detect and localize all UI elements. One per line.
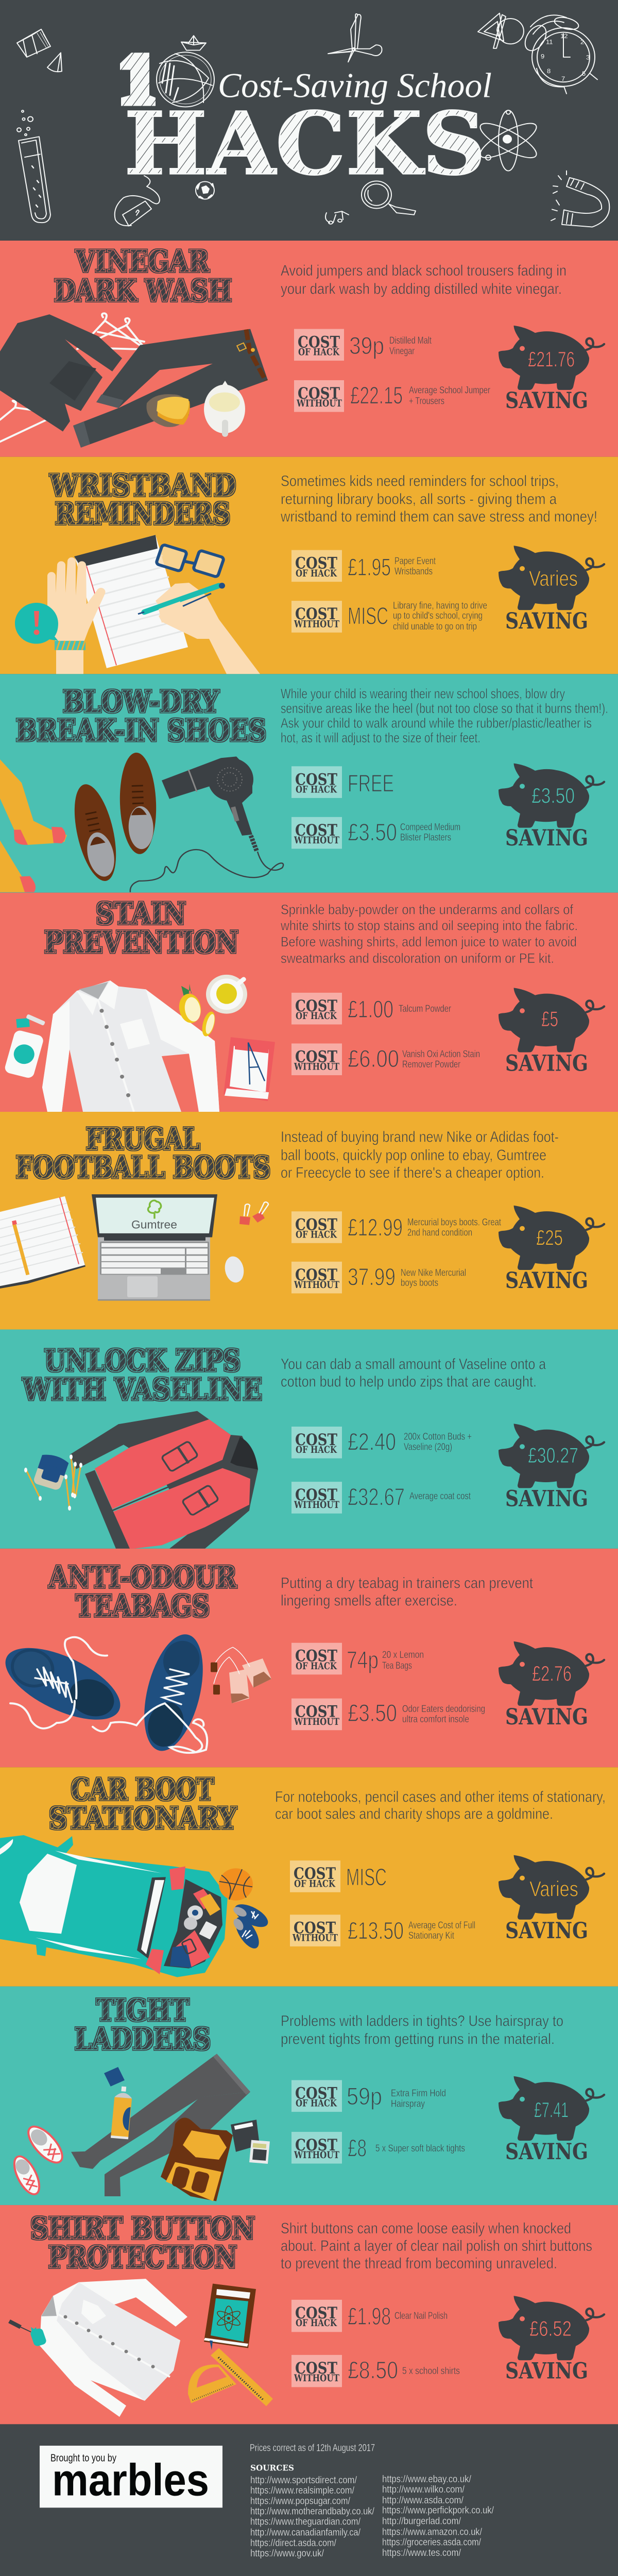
price note: Prices correct as of 12th August 2017 <box>250 2443 375 2453</box>
note: Compeed Medium <box>400 822 460 833</box>
value: £12.99 <box>348 1214 403 1241</box>
badge: cost of hack: COST <box>295 1430 337 1449</box>
badge: cost of hack: OF HACK <box>296 1660 337 1672</box>
saving label: SAVING <box>505 1704 588 1730</box>
note: Tea Bags <box>382 1660 412 1671</box>
panel: stain prevention <box>0 893 618 1112</box>
saving amount: £6.52 <box>529 2317 572 2341</box>
icon: piggy bank <box>499 2076 604 2141</box>
sources column 2 <box>382 2474 494 2558</box>
note: Paper Event <box>394 556 436 567</box>
note <box>394 556 436 577</box>
body text: Putting a dry teabag in trainers can prevent <box>281 1575 534 1591</box>
value: 37.99 <box>348 1263 396 1291</box>
clock numerals: 5 <box>582 70 586 77</box>
icon: alarm clock <box>521 15 597 94</box>
badge: cost of hack: OF HACK <box>296 1229 337 1240</box>
badge: cost of hack: COST <box>295 770 337 789</box>
heading: CAR BOOT <box>71 1772 214 1807</box>
heading: WRISTBAND <box>49 468 236 503</box>
body text: Sprinkle baby-powder on the underarms and collars of <box>281 902 573 917</box>
badge: cost of hack: OF HACK <box>296 2317 337 2329</box>
heading <box>54 244 232 309</box>
note: Average Cost of Full <box>408 1920 475 1931</box>
note: Stationary Kit <box>408 1930 454 1941</box>
value: FREE <box>348 770 394 797</box>
sources column 2: http://www.wilko.com/ <box>382 2484 465 2495</box>
heading: BREAK-IN SHOES <box>16 714 266 749</box>
badge: cost of hack: COST <box>295 1647 337 1665</box>
icon: piggy bank <box>499 1641 604 1706</box>
body text: You can dab a small amount of Vaseline onto a <box>281 1356 546 1372</box>
illustration: coat, vaseline, cotton buds <box>24 1411 258 1549</box>
note: ultra comfort insole <box>402 1714 469 1725</box>
badge: cost of hack: COST <box>295 553 337 572</box>
sources column 1: https://www.realsimple.com/ <box>250 2485 354 2496</box>
clock numerals <box>541 32 590 82</box>
panel: tight ladders <box>0 1987 618 2205</box>
icon: piggy bank <box>499 1206 604 1270</box>
illustration: car with open boot <box>0 1835 272 1977</box>
badge: cost of hack <box>291 550 342 582</box>
body text <box>281 686 608 745</box>
badge: cost of hack: COST <box>295 1215 337 1234</box>
badge: cost without <box>291 2132 342 2164</box>
body text <box>281 1129 559 1181</box>
note: Average School Jumper <box>409 385 490 396</box>
saving label: SAVING <box>505 1486 588 1512</box>
note: up to child's school, crying <box>393 611 483 621</box>
badge: cost of hack <box>291 766 342 798</box>
panel: header <box>0 0 618 241</box>
note <box>391 2088 446 2109</box>
saving amount: Varies <box>529 1877 578 1901</box>
value: 74p <box>347 1647 379 1674</box>
body text <box>281 1575 534 1609</box>
note: 5 x Super soft black tights <box>375 2143 465 2154</box>
badge: cost of hack: OF HACK <box>294 1878 336 1889</box>
note <box>393 600 487 632</box>
note <box>401 1267 466 1289</box>
sources column 2: https://www.perfickpork.co.uk/ <box>382 2505 494 2516</box>
badge: cost without: COST <box>298 384 340 403</box>
icon: piggy bank <box>499 2296 604 2360</box>
sources column 2: http://burgerlad.com/ <box>382 2516 461 2527</box>
note <box>407 1217 501 1238</box>
note: + Trousers <box>409 396 444 406</box>
value: MISC <box>346 1864 387 1891</box>
saving amount: £2.76 <box>532 1662 572 1686</box>
badge: cost without: WITHOUT <box>296 398 342 409</box>
panel: anti-odour teabags <box>0 1549 618 1767</box>
icon: basketball as zero <box>157 52 214 107</box>
note: Hairspray <box>391 2098 425 2109</box>
icon: cone <box>47 53 62 72</box>
badge: cost without: COST <box>295 1265 337 1284</box>
badge: cost without <box>291 601 342 633</box>
icon: football <box>196 181 214 199</box>
heading <box>16 1122 270 1185</box>
note: Library fine, having to drive <box>393 600 487 611</box>
panel: shirt button protection <box>0 2205 618 2424</box>
sources column 2: https://www.ebay.co.uk/ <box>382 2474 471 2485</box>
saving label: SAVING <box>505 1268 588 1294</box>
note: Mercurial boys boots. Great <box>407 1217 501 1228</box>
clock numerals: 7 <box>561 76 565 82</box>
note: Vinegar <box>389 346 415 357</box>
value: MISC <box>348 603 388 630</box>
value: £32.67 <box>348 1484 405 1511</box>
clock numerals: 3 <box>586 54 590 61</box>
heading: FOOTBALL BOOTS <box>16 1150 270 1185</box>
badge: cost of hack: OF HACK <box>296 567 337 579</box>
body text <box>281 263 566 297</box>
badge: cost without: COST <box>294 1918 336 1937</box>
note <box>400 822 460 843</box>
note <box>402 1704 485 1725</box>
body text: your dark wash by adding distilled white vinegar. <box>281 281 562 297</box>
note: Talcum Powder <box>399 1003 451 1014</box>
badge: cost without: WITHOUT <box>294 834 339 846</box>
icon: piggy bank <box>499 1423 604 1488</box>
panel: car boot stationary <box>0 1767 618 1987</box>
icon: magnet <box>551 171 609 227</box>
sources column 1: https://www.popsugar.com/ <box>250 2496 350 2507</box>
icon: piggy bank <box>499 326 604 390</box>
heading: VINEGAR <box>75 244 209 279</box>
saving label: SAVING <box>505 608 588 634</box>
heading <box>30 2211 255 2275</box>
badge: cost without: WITHOUT <box>294 2149 339 2161</box>
badge: cost without: WITHOUT <box>294 1061 339 1072</box>
icon: music notes <box>325 211 349 224</box>
badge: cost of hack <box>290 1860 340 1892</box>
sources column 1: http://www.sportsdirect.com/ <box>250 2475 357 2486</box>
badge: cost of hack: COST <box>298 332 340 351</box>
badge: cost of hack <box>291 2080 342 2112</box>
sources column 2: http://www.asda.com/ <box>382 2495 464 2506</box>
heading <box>48 1560 237 1624</box>
note <box>382 1650 424 1671</box>
body text <box>281 2013 563 2047</box>
saving amount: £5 <box>541 1007 558 1031</box>
note: Vaseline (20g) <box>404 1442 452 1452</box>
icon: piggy bank <box>499 764 604 828</box>
badge: cost without: WITHOUT <box>294 2372 339 2384</box>
illustration: shirt, nail polish, book, ruler <box>9 2279 273 2417</box>
badge: cost without: WITHOUT <box>292 1932 338 1943</box>
clock numerals: 8 <box>547 67 551 75</box>
note: 20 x Lemon <box>382 1650 424 1660</box>
body text: Instead of buying brand new Nike or Adidas foot- <box>281 1129 559 1146</box>
badge: cost without: COST <box>295 821 337 840</box>
badge: cost without: WITHOUT <box>294 618 339 630</box>
saving amount: £7.41 <box>534 2098 569 2122</box>
panel: vinegar dark wash <box>0 241 618 457</box>
value: 39p <box>349 332 384 360</box>
heading: BLOW-DRY <box>63 685 219 720</box>
heading: FRUGAL <box>86 1122 200 1157</box>
note: Remover Powder <box>402 1059 460 1070</box>
sources column 1: https://direct.asda.com/ <box>250 2538 336 2549</box>
logo: brought to you by marbles: marbles <box>52 2455 209 2505</box>
note: Odor Eaters deodorising <box>402 1704 485 1715</box>
value: £1.95 <box>348 554 391 581</box>
heading <box>75 1993 211 2057</box>
sources column 1 <box>250 2475 374 2559</box>
badge: cost of hack <box>291 2300 342 2332</box>
value: £6.00 <box>348 1045 399 1073</box>
body text: to prevent the thread from becoming unraveled. <box>281 2256 557 2272</box>
body text <box>281 2221 592 2272</box>
value: 59p <box>347 2083 382 2110</box>
title: cost-saving school: Cost-Saving School <box>218 66 492 105</box>
saving label: SAVING <box>505 2358 588 2384</box>
heading <box>16 685 266 749</box>
heading: PROTECTION <box>48 2240 237 2275</box>
sources column 2: https://www.tes.com/ <box>382 2548 461 2558</box>
badge: cost without: COST <box>295 1485 337 1504</box>
saving amount: £30.27 <box>528 1444 578 1468</box>
heading: STAIN <box>96 896 186 931</box>
icon: magnifying glass <box>362 181 416 215</box>
note: 2nd hand condition <box>407 1227 472 1238</box>
note: New Nike Mercurial <box>401 1267 466 1278</box>
value: £1.98 <box>348 2303 391 2330</box>
value: £13.50 <box>348 1918 404 1944</box>
heading <box>44 896 238 960</box>
body text: sweatmarks and discoloration on uniform or PE kit. <box>281 951 554 966</box>
note: 5 x school shirts <box>402 2365 460 2377</box>
saving label: SAVING <box>505 1051 588 1076</box>
sources column 2: https://www.amazon.co.uk/ <box>382 2527 482 2537</box>
illustration: shirt, spray, lemons, notebook <box>4 975 275 1112</box>
body text: car boot sales and charity shops are a goldmine. <box>275 1806 553 1823</box>
badge: cost of hack: OF HACK <box>296 784 337 795</box>
heading: LADDERS <box>75 2022 211 2057</box>
icon: piggy bank <box>499 1855 604 1920</box>
value: £1.00 <box>348 996 393 1023</box>
badge: cost without <box>291 1699 342 1730</box>
sources column 1: https://www.gov.uk/ <box>250 2548 324 2559</box>
badge: cost without: COST <box>295 2136 337 2155</box>
note <box>409 385 490 406</box>
badge: cost without <box>290 1914 340 1946</box>
note: Wristbands <box>394 566 433 577</box>
illustration: tights, hairspray, backpack, sneakers <box>9 2054 270 2201</box>
badge: cost without: COST <box>295 604 337 623</box>
note: Average coat cost <box>409 1491 471 1502</box>
saving amount: £25 <box>536 1226 563 1250</box>
badge: cost of hack <box>291 1211 342 1243</box>
title: hacks: HACKS <box>124 94 486 194</box>
sources column 1: http://www.motherandbaby.co.uk/ <box>250 2506 374 2517</box>
saving label: SAVING <box>505 2139 588 2165</box>
body text: or Freecycle to see if there's a cheaper option. <box>281 1165 544 1181</box>
illustration: jumper, trousers, hangers, vinegar <box>0 313 268 448</box>
sources heading: SOURCES <box>250 2463 294 2472</box>
badge: cost of hack: OF HACK <box>296 1444 337 1455</box>
note <box>408 1920 475 1941</box>
illustration: shoes, socks, hairdryer <box>0 752 283 892</box>
note: Blister Plasters <box>400 832 451 843</box>
value: £2.40 <box>348 1429 396 1455</box>
saving label: SAVING <box>505 825 588 851</box>
badge: cost of hack <box>291 1427 342 1459</box>
note: boys boots <box>401 1278 438 1289</box>
badge: cost of hack: COST <box>295 2303 337 2323</box>
panel: unlock zips with vaseline <box>0 1330 618 1549</box>
clock numerals: 9 <box>541 53 544 60</box>
note: Distilled Malt <box>389 335 432 346</box>
badge: cost without <box>291 817 342 849</box>
heading: TIGHT <box>96 1993 189 2028</box>
badge: cost of hack: COST <box>295 996 337 1015</box>
panel: footer <box>0 2424 618 2576</box>
badge: cost without: COST <box>295 2359 337 2378</box>
note: Vanish Oxi Action Stain <box>402 1048 480 1060</box>
badge: cost of hack <box>291 1643 342 1674</box>
heading: UNLOCK ZIPS <box>44 1344 241 1379</box>
panel: blow-dry break-in shoes <box>0 674 618 893</box>
saving amount: Varies <box>529 567 578 591</box>
value: £22.15 <box>350 382 403 409</box>
body text: returning library books, all sorts - giving them a <box>281 491 557 507</box>
heading: ANTI-ODOUR <box>48 1560 237 1595</box>
badge: cost of hack: COST <box>294 1864 336 1883</box>
icon: scissors <box>328 14 382 62</box>
body text <box>280 902 578 966</box>
number 1 <box>120 53 156 106</box>
badge: cost of hack: OF HACK <box>296 2097 337 2109</box>
note <box>402 1048 480 1070</box>
clock numerals: 11 <box>546 39 553 45</box>
sources column 2: https://groceries.asda.com/ <box>382 2537 481 2548</box>
heading: PREVENTION <box>44 925 238 960</box>
logo: brought to you by marbles: Brought to you by <box>50 2452 117 2464</box>
value: £3.50 <box>348 1700 397 1727</box>
body text: lingering smells after exercise. <box>281 1592 457 1609</box>
panel: wristband reminders <box>0 457 618 674</box>
illustration: notepad, hands, glasses <box>15 535 260 674</box>
badge: cost of hack <box>291 993 342 1024</box>
note <box>404 1431 472 1452</box>
saving label: SAVING <box>505 388 588 414</box>
saving label: SAVING <box>505 1918 588 1944</box>
value: £8.50 <box>348 2357 398 2384</box>
sources column 1: http://www.canadianfamily.ca/ <box>250 2527 360 2538</box>
clock numerals: 12 <box>560 32 568 40</box>
badge: cost without <box>291 2355 342 2387</box>
heading: SHIRT BUTTON <box>30 2211 255 2246</box>
body text: ball boots, quickly pop online to ebay, Gumtree <box>281 1147 546 1164</box>
heading: STATIONARY <box>49 1801 236 1836</box>
icon: piggy bank <box>499 546 604 610</box>
icon: test tube with bubbles <box>17 110 50 223</box>
badge: cost without <box>291 1482 342 1514</box>
body text <box>281 1356 546 1390</box>
note: child unable to go on trip <box>393 621 477 632</box>
panel: frugal football boots <box>0 1112 618 1330</box>
note: Extra Firm Hold <box>391 2088 446 2099</box>
body text: cotton bud to help undo zips that are caught. <box>281 1374 537 1390</box>
body text: hot, as it will adjust to the size of their feet. <box>281 730 480 745</box>
heading: TEABAGS <box>76 1589 210 1624</box>
icon: set squares <box>478 13 524 48</box>
badge: cost of hack <box>294 329 344 361</box>
badge: cost without <box>291 1043 342 1075</box>
icon: cube <box>17 29 50 57</box>
icon: paper boat <box>181 36 206 50</box>
sources column 1: https://www.theguardian.com/ <box>250 2516 360 2527</box>
badge: cost of hack: COST <box>295 2083 337 2103</box>
note: Clear Nail Polish <box>394 2310 448 2321</box>
badge: cost without <box>291 1262 342 1293</box>
icon: piggy bank <box>499 988 604 1052</box>
heading: REMINDERS <box>55 497 230 532</box>
clock numerals: 2 <box>580 39 584 45</box>
badge: cost without: WITHOUT <box>294 1499 339 1511</box>
heading: WITH VASELINE <box>22 1372 262 1408</box>
illustration: notebook, laptop, clips, mouse: Gumtree <box>131 1218 177 1231</box>
badge: cost without <box>294 380 344 412</box>
badge: cost without: WITHOUT <box>294 1279 339 1291</box>
badge: cost without: WITHOUT <box>294 1716 339 1727</box>
icon: atom <box>476 110 541 171</box>
badge: cost of hack: OF HACK <box>296 1010 337 1022</box>
badge: cost of hack: OF HACK <box>298 346 340 358</box>
saving amount: £21.76 <box>528 347 575 371</box>
body text: Sometimes kids need reminders for school trips, <box>281 473 559 489</box>
illustration: notebook, laptop, clips, mouse <box>0 1194 268 1301</box>
value: £3.50 <box>348 819 397 846</box>
heading <box>49 468 236 532</box>
badge: cost without: COST <box>295 1047 337 1066</box>
body text: Problems with ladders in tights? Use hairspray to <box>281 2013 563 2029</box>
badge: cost without: COST <box>295 1702 337 1721</box>
saving amount: £3.50 <box>531 784 575 808</box>
body text <box>275 1789 606 1823</box>
body text <box>280 473 597 526</box>
icon: phone and earphones <box>115 176 160 226</box>
body text: prevent tights from getting runs in the material. <box>281 2031 555 2047</box>
note: 200x Cotton Buds + <box>404 1431 472 1442</box>
value: £8 <box>348 2134 367 2162</box>
note <box>389 335 432 357</box>
heading: DARK WASH <box>54 274 232 309</box>
heading <box>22 1344 262 1408</box>
heading <box>49 1772 236 1836</box>
illustration: trainers and teabags <box>0 1629 271 1756</box>
